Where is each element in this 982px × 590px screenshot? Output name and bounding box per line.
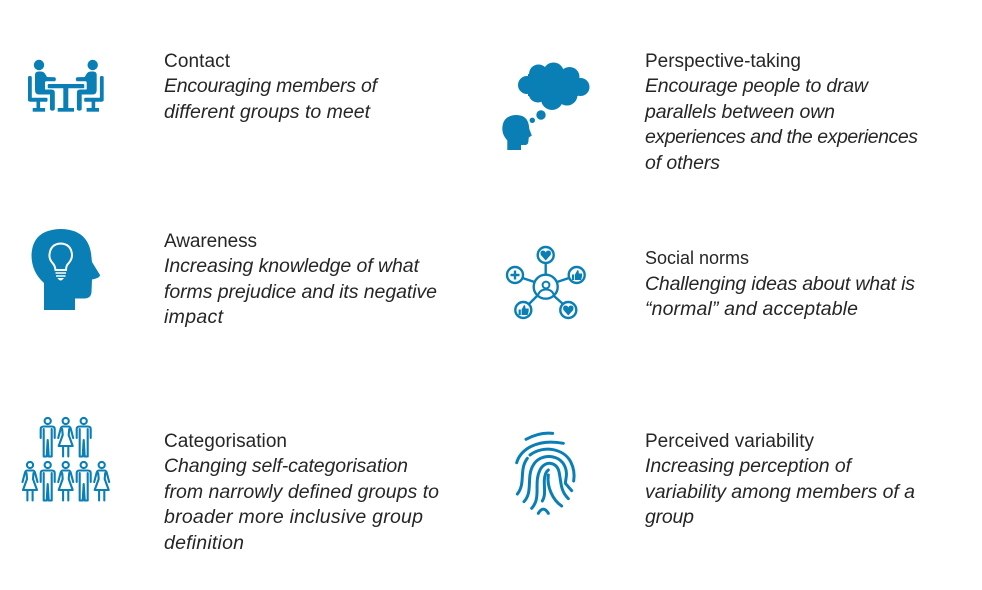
panel: categorisation bbox=[22, 418, 439, 554]
text: social norms description: “normal” and acceptable bbox=[645, 298, 858, 320]
text: perceived variability description: group bbox=[645, 506, 694, 528]
text: perspective-taking description: parallels between own bbox=[644, 101, 835, 123]
text: categorisation description: broader more inclusive group bbox=[164, 506, 423, 528]
text: categorisation description: Changing self-categorisation bbox=[164, 455, 408, 477]
text: awareness description: impact bbox=[164, 306, 225, 328]
text: social norms description bbox=[645, 273, 915, 320]
panel: perceived variability bbox=[517, 431, 915, 528]
heading: awareness: Awareness bbox=[164, 231, 257, 252]
text: awareness description: forms prejudice and its negative bbox=[164, 281, 437, 303]
icon: groups of people bbox=[22, 418, 109, 500]
text: awareness description bbox=[164, 255, 437, 328]
text: perceived variability description: Increasing perception of bbox=[645, 455, 854, 477]
text: perspective-taking description: experiences and the experiences bbox=[645, 126, 918, 148]
heading: perceived variability: Perceived variability bbox=[645, 431, 814, 452]
text: contact description: different groups to meet bbox=[164, 101, 372, 123]
text: perceived variability description: variability among members of a bbox=[645, 481, 915, 503]
panel: contact bbox=[28, 51, 380, 123]
panel: awareness bbox=[32, 229, 437, 328]
icon: social network bbox=[507, 247, 585, 318]
text: perspective-taking description: Encourage people to draw bbox=[645, 75, 870, 97]
text: categorisation description: from narrowly defined groups to bbox=[164, 481, 439, 503]
text: contact description bbox=[164, 75, 380, 123]
icon: fingerprint bbox=[517, 433, 574, 513]
text: perceived variability description bbox=[645, 455, 915, 528]
heading: contact: Contact bbox=[164, 51, 231, 72]
heading: perspective-taking: Perspective-taking bbox=[645, 51, 801, 72]
text: perspective-taking description: of others bbox=[645, 152, 720, 174]
text: perspective-taking description bbox=[644, 75, 918, 174]
panel: perspective-taking bbox=[502, 51, 918, 174]
heading: categorisation: Categorisation bbox=[164, 431, 287, 452]
text: contact description: Encouraging members of bbox=[164, 75, 380, 97]
text: categorisation description: definition bbox=[164, 532, 244, 554]
icon: two people meeting at a table bbox=[28, 60, 104, 112]
heading: social norms: Social norms bbox=[645, 248, 749, 268]
text: social norms description: Challenging ideas about what is bbox=[645, 273, 915, 295]
text: awareness description: Increasing knowledge of what bbox=[164, 255, 421, 277]
icon: head with thought bubble bbox=[502, 62, 590, 150]
text: categorisation description bbox=[164, 455, 439, 554]
panel: social norms bbox=[507, 247, 915, 320]
icon: head with light bulb bbox=[32, 229, 100, 310]
